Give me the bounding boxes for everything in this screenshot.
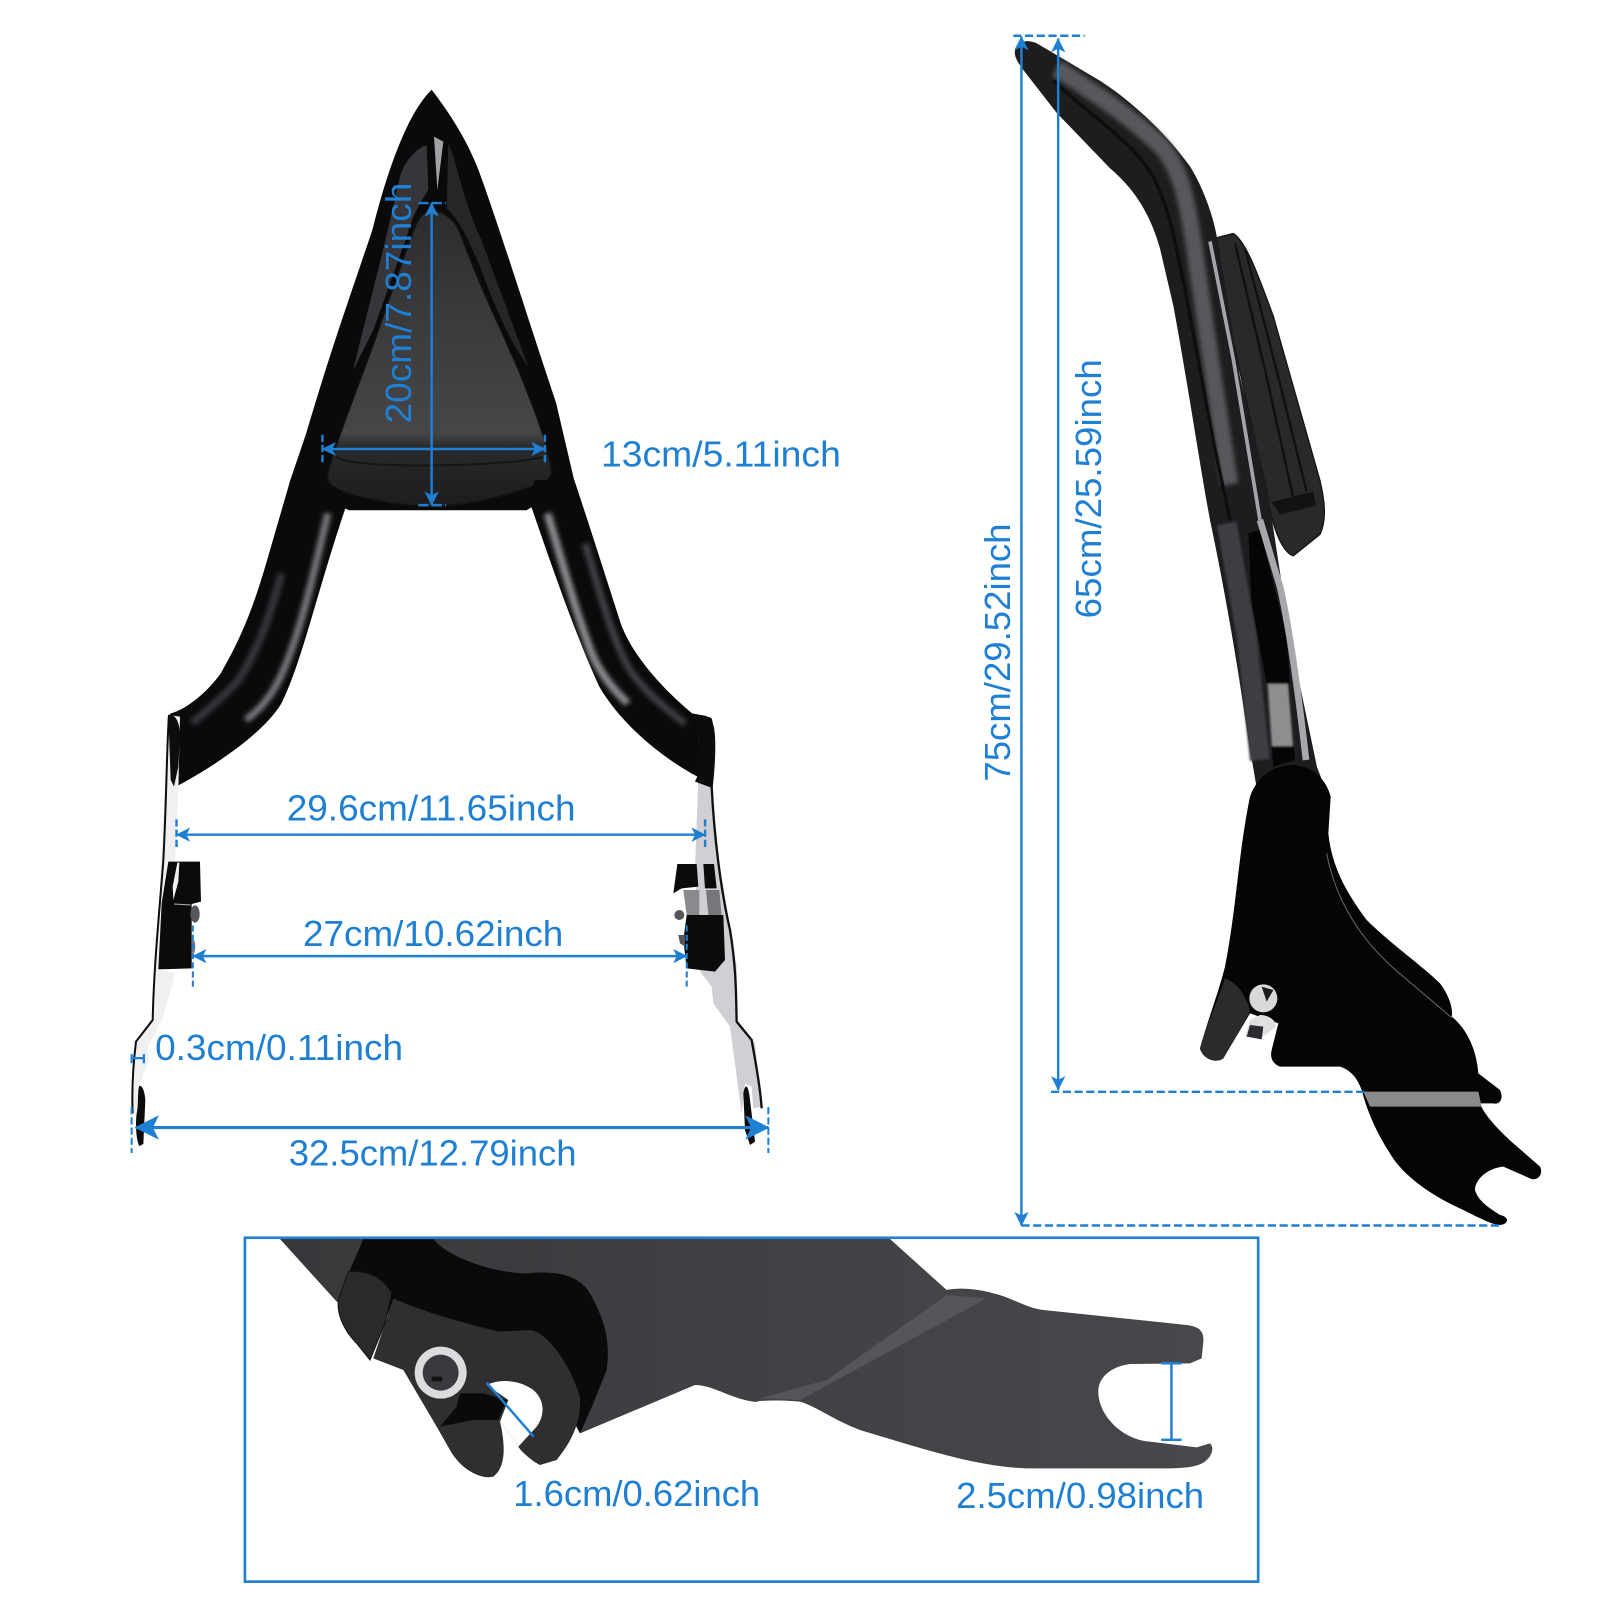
- dimension: 32.5cm overall width: 32.5cm/12.79inch: [289, 1133, 577, 1173]
- side lower plate: [1200, 765, 1541, 1225]
- dimension: 1.6cm slot width: [487, 1383, 760, 1514]
- dimension: 20cm pad height: 20cm/7.87inch: [379, 183, 419, 423]
- dimension: 13cm pad width: 13cm/5.11inch: [601, 434, 841, 474]
- dimension: 75cm total height: 75cm/29.52inch: [978, 523, 1018, 782]
- hex bolt: [415, 1347, 467, 1399]
- dimension: 2.5cm notch width: 2.5cm/0.98inch: [956, 1476, 1204, 1516]
- dimension: 29.6cm inner width: 29.6cm/11.65inch: [287, 788, 576, 828]
- left side plate and bracket: [132, 715, 201, 1146]
- lower tube gloss: [1227, 520, 1306, 767]
- dimension: 0.3cm thickness: 0.3cm/0.11inch: [155, 1028, 403, 1068]
- dimension: 32.5cm overall width: [132, 1107, 768, 1173]
- panel: side view of sissy bar: [1015, 41, 1541, 1225]
- dimension: 13cm pad width: [322, 434, 841, 474]
- right leg: [528, 480, 714, 777]
- dimension: 65cm height to strut: 65cm/25.59inch: [1069, 359, 1109, 618]
- dimension: 27cm bracket width: [193, 914, 687, 987]
- panel: detail view box: [245, 1238, 1258, 1582]
- dimension: 1.6cm slot width: 1.6cm/0.62inch: [513, 1474, 760, 1514]
- detail frame: [245, 1238, 1258, 1582]
- dimension: 2.5cm notch width: [956, 1363, 1204, 1516]
- backrest pad: [327, 210, 552, 507]
- side tube: [1015, 41, 1325, 788]
- panel: front view of sissy bar: [132, 90, 762, 1146]
- front frame upper triangle: [290, 90, 574, 510]
- dimension: 29.6cm inner width: [177, 788, 705, 850]
- dimension: 20cm pad height: [379, 183, 446, 505]
- left leg: [167, 480, 349, 787]
- frame gloss highlights: [353, 137, 528, 370]
- right side plate and bracket: [673, 717, 762, 1145]
- dimension: 27cm bracket width: 27cm/10.62inch: [303, 914, 563, 954]
- side pad: [1217, 234, 1324, 556]
- dimension: 75cm total height: [978, 36, 1500, 1226]
- detail bracket: [280, 1239, 1212, 1477]
